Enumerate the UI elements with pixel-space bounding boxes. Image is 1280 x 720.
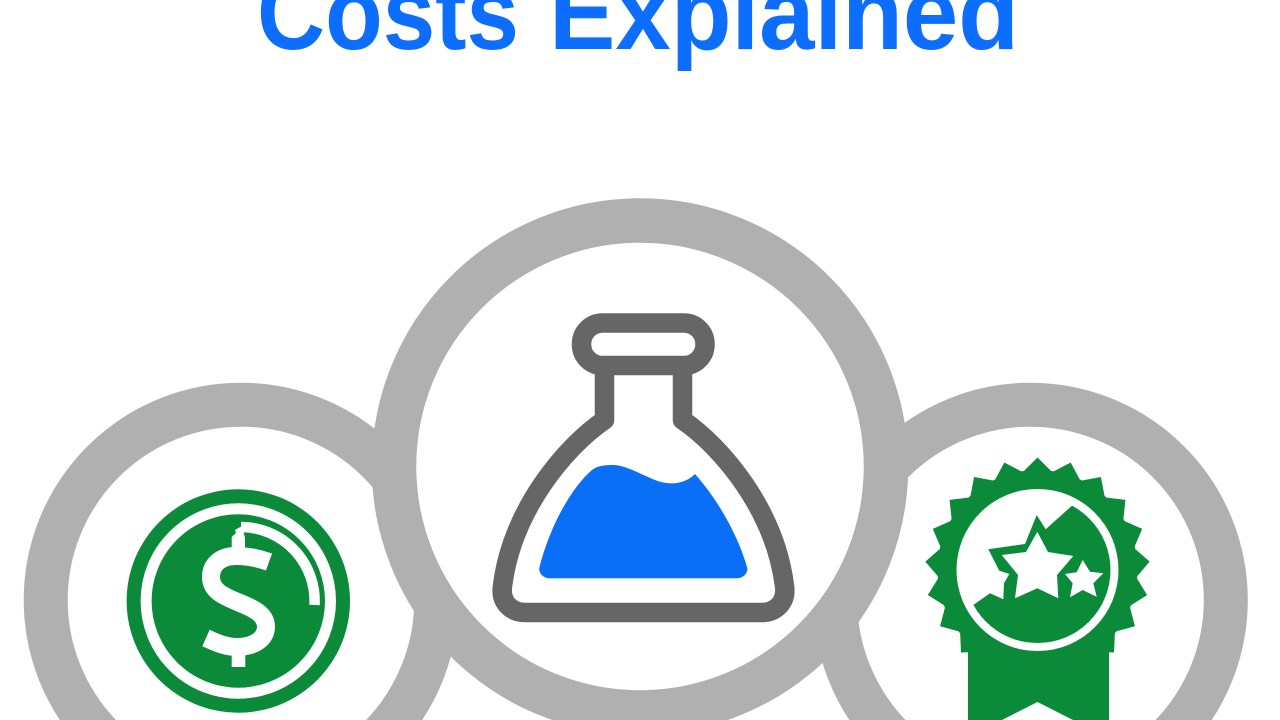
- icon: dollar coin: [127, 489, 350, 713]
- left ring: [46, 405, 436, 720]
- title: [257, 0, 1019, 72]
- center ring: [394, 220, 886, 712]
- panel: left circle, money: [46, 405, 436, 720]
- panel: right circle, quality: [835, 405, 1226, 720]
- icon: lab flask: [502, 323, 785, 612]
- panel: center circle, science: [394, 220, 886, 712]
- icon: award ribbon badge: [924, 458, 1151, 720]
- right ring: [835, 405, 1226, 720]
